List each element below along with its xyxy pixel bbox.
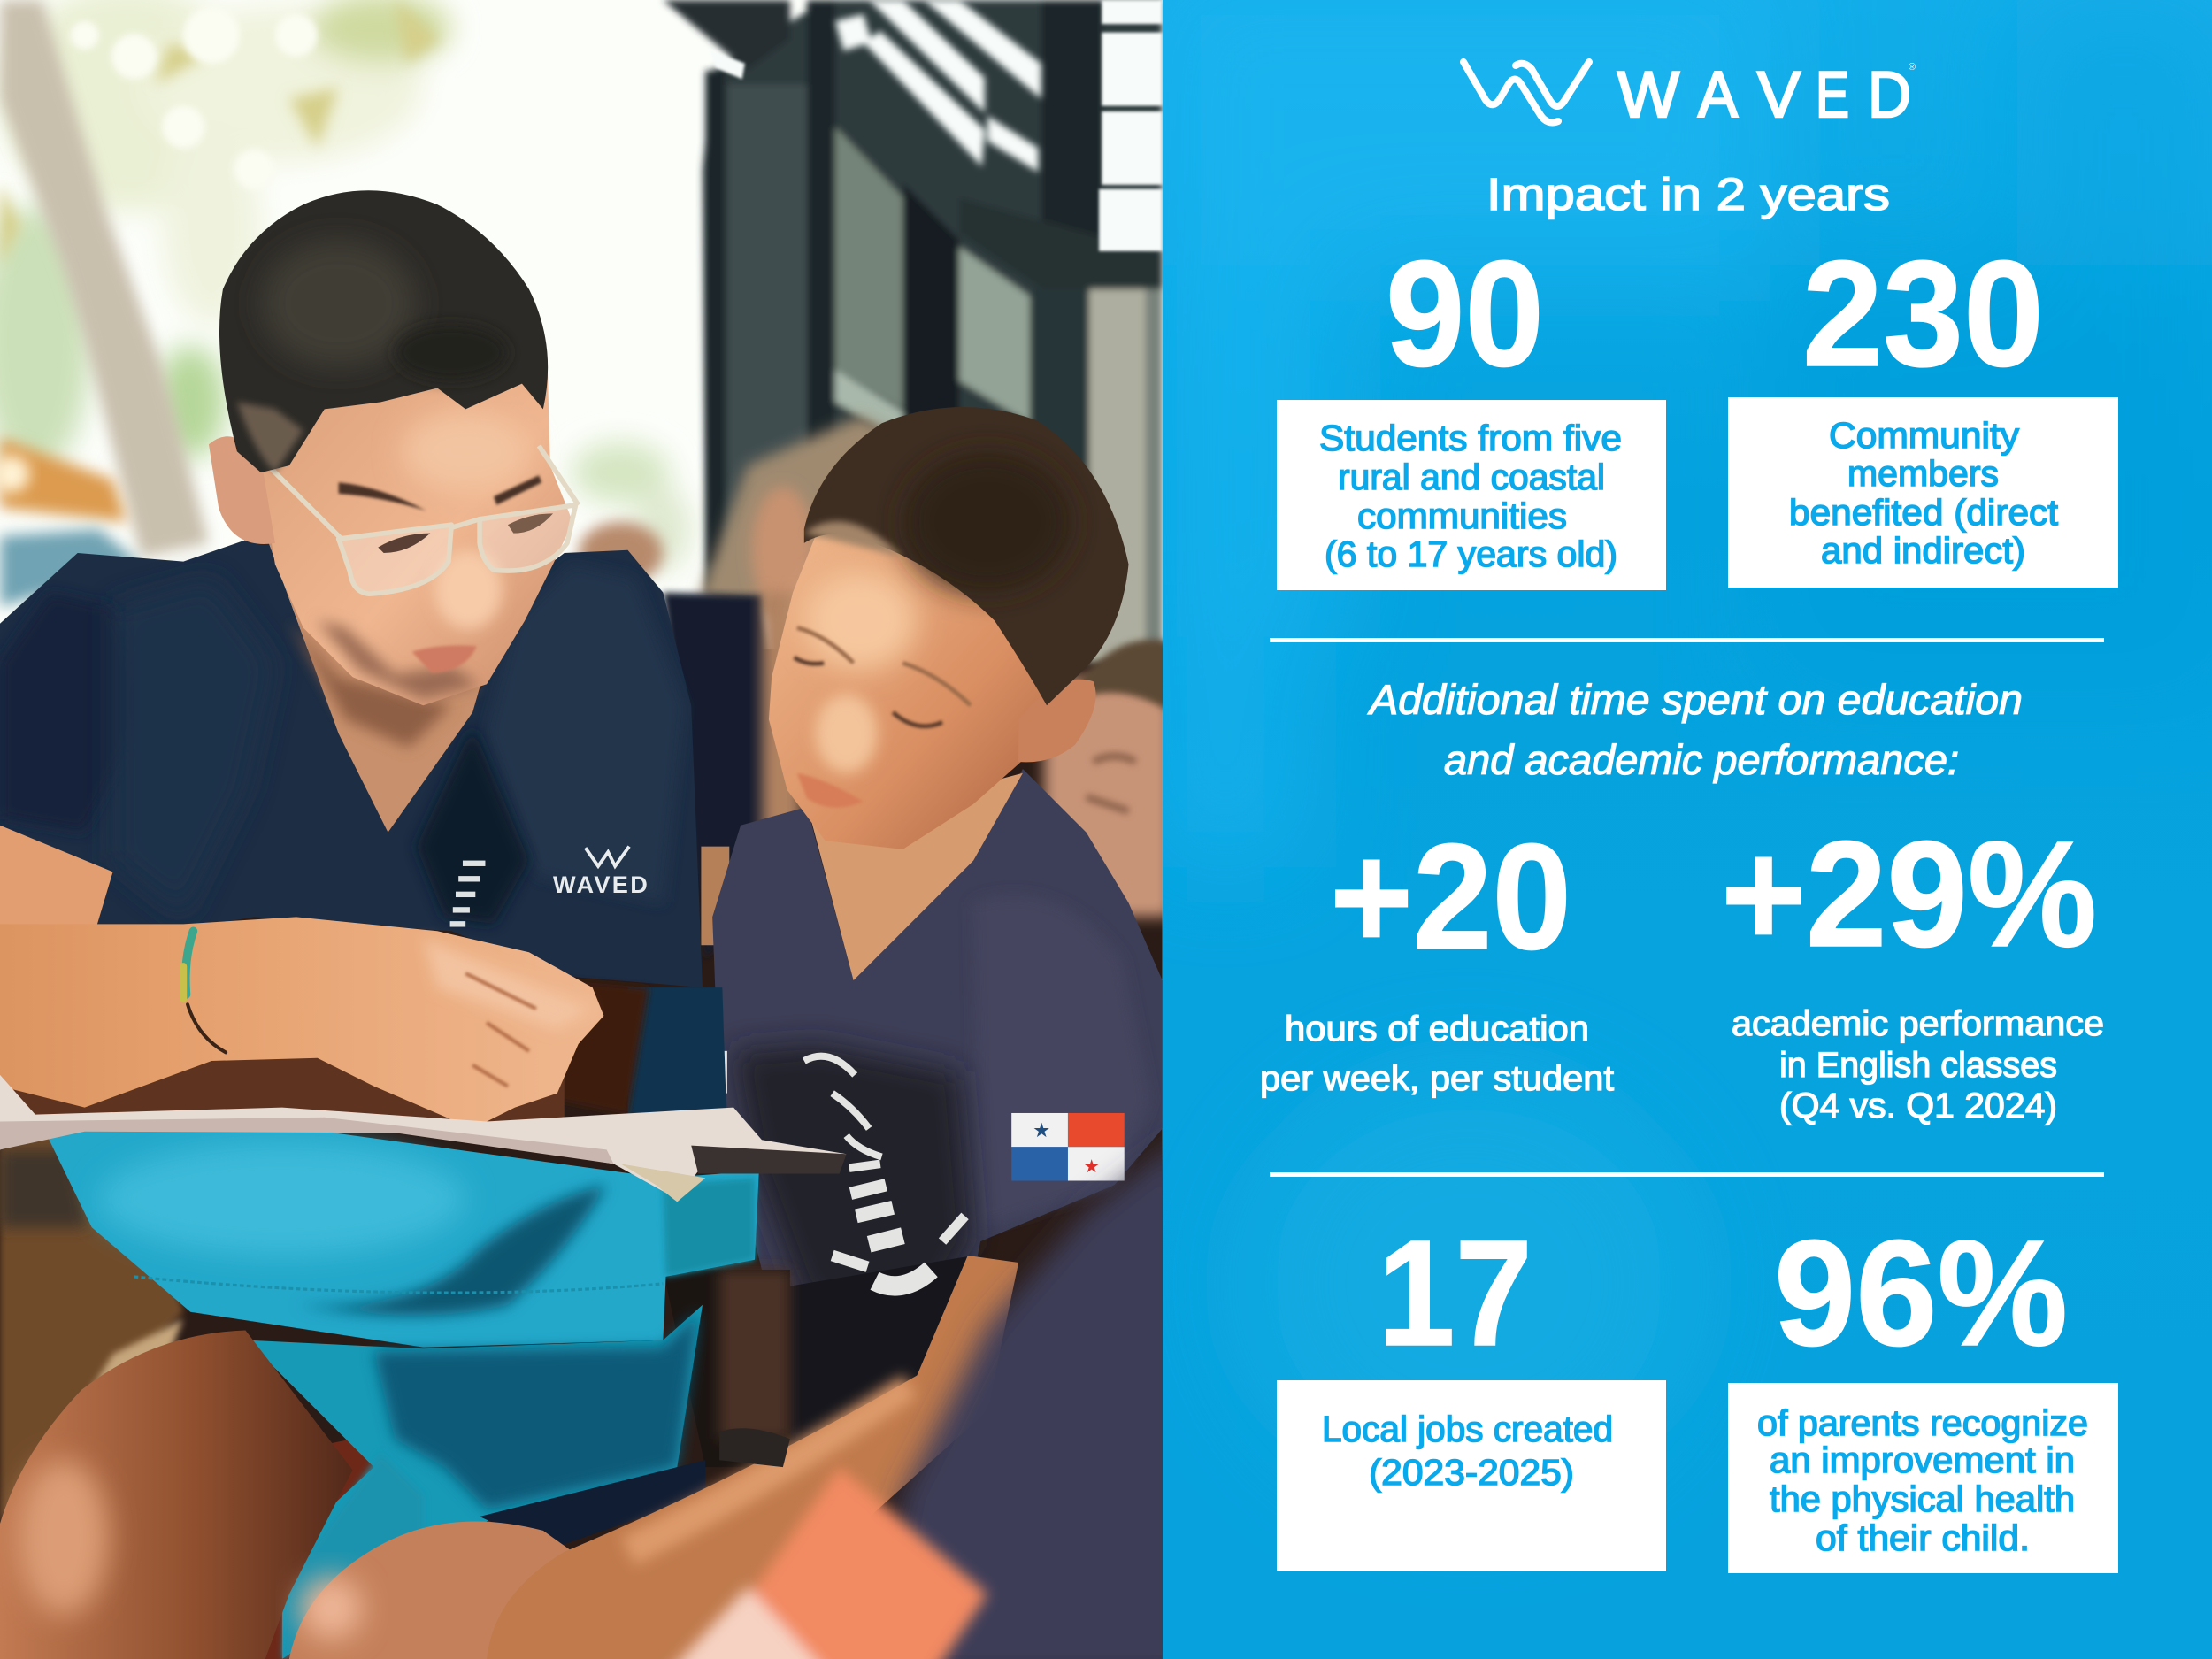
background between figures: seat and dark gaps [0,980,790,1659]
boy: neck [807,773,1023,980]
photo background: tree trunk [0,0,209,557]
flag patch: Panama: ★ [1033,1119,1050,1141]
man: navy t-shirt [0,534,703,987]
logo: WAVED [1463,59,1916,131]
foreground: blurred orange object [663,1467,987,1659]
card: community members [1728,397,2118,588]
logo wordmark: V [1757,59,1801,131]
man: glasses [237,434,579,594]
boy: knee, arm and hand [289,1256,1018,1659]
man: WAVED shirt logo: WAVED [553,871,648,898]
logo wordmark: D [1868,59,1911,131]
teal cloth over lap [42,1125,759,1348]
stat: +20: +20 [1330,813,1571,981]
card: parents: the physical health [1770,1479,2075,1519]
card: community members: benefited (direct [1789,492,2059,533]
boy: lips [797,773,864,808]
boy: hair [804,407,1129,705]
card: community members: and indirect) [1821,530,2025,571]
logo wordmark: A [1698,59,1738,131]
panel: blue impact statistics [1141,0,2212,1659]
caption: academic performance: (Q4 vs. Q1 2024) [1779,1087,2057,1125]
card: students [1277,400,1666,590]
boy: dark t-shirt [712,769,1163,1467]
man: lips [412,645,477,673]
card: community members: Community [1829,415,2020,456]
flag patch: Panama [1011,1113,1125,1181]
card: local jobs: Local jobs created [1322,1409,1613,1449]
flag patch: Panama: ★ [1083,1156,1100,1177]
foreground: blurred person in dark shirt [872,1135,1185,1659]
card: community members: members [1847,453,1999,494]
subheading: additional time [1367,676,2023,783]
notebook on lap [0,1075,847,1202]
stat: 17: 17 [1378,1210,1532,1378]
stat: +29%: +29% [1721,810,2097,979]
photo: mentor and student reading together [0,0,1185,1659]
photo background: blurred children behind [579,416,1171,959]
man: WAVED shirt logo [553,847,648,898]
card: students: (6 to 17 years old) [1325,534,1617,574]
man: face [209,360,579,705]
man: hair [219,190,548,472]
caption: academic performance: academic performance [1732,1004,2104,1043]
stat: 230: 230 [1802,230,2044,398]
man: teal shorts [247,1305,705,1659]
card: students: rural and coastal [1338,457,1605,497]
card: students: Students from five [1319,418,1622,458]
subheading: additional time: Additional time spent on education [1367,676,2023,723]
card: parents: of their child. [1816,1517,2030,1558]
card: students: communities [1357,495,1567,536]
man: thigh [0,1331,353,1659]
caption: hours of education: per week, per student [1260,1059,1614,1098]
boy: face [769,529,1096,849]
caption: academic performance [1732,1004,2104,1125]
card: parents [1728,1383,2118,1573]
panel background: blue overlay [1141,0,2212,1659]
logo wordmark: ® [1909,62,1916,73]
caption: hours of education: hours of education [1285,1010,1589,1048]
logo mark [1463,62,1589,122]
card: parents: an improvement in [1770,1440,2075,1480]
stat: 96%: 96% [1774,1210,2068,1378]
man: shirt sleeve stripes [450,861,485,927]
photo background: bright slats and panes [835,0,1041,173]
man: neck [265,534,487,833]
boy: shirt chest print [724,1051,965,1286]
card: local jobs: (2023-2025) [1369,1452,1574,1493]
caption: academic performance: in English classes [1779,1046,2057,1085]
photo background: bright garden and foliage [0,0,1163,1659]
caption: hours of education [1260,1010,1614,1098]
photo background: dark window structure [663,0,1163,663]
card: parents: of parents recognize [1757,1402,2088,1443]
subheading: additional time: and academic performance: [1444,736,1959,783]
card: local jobs [1277,1380,1666,1571]
heading: Impact in 2 years: Impact in 2 years [1486,169,1890,219]
logo wordmark: E [1816,59,1849,131]
man: ear [209,436,275,544]
man: arm and hand [0,826,603,1129]
logo wordmark [1617,59,1916,131]
logo wordmark: W [1617,59,1679,131]
man: eyebrows [339,475,541,511]
boy: eyes [795,628,971,726]
stat: 90: 90 [1386,230,1544,398]
boy: ear [1018,680,1096,762]
man: bracelet [183,931,226,1052]
